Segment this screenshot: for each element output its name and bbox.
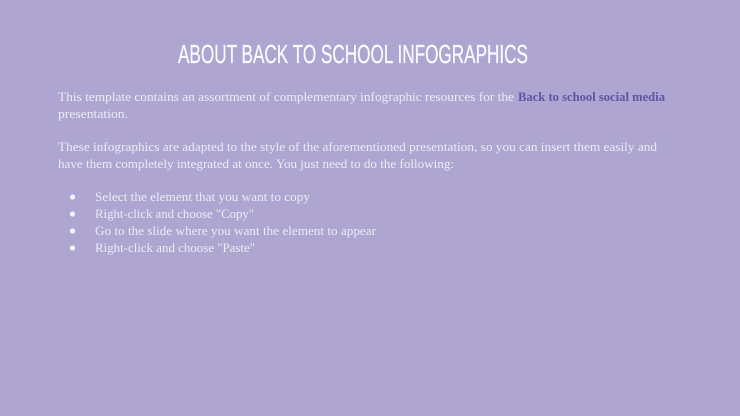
intro paragraph <box>58 89 665 121</box>
bullet list: Select the element that you want to copy <box>95 189 311 204</box>
bullet list <box>70 189 377 255</box>
second paragraph: have them completely integrated at once. You just need to do the following: <box>58 156 454 171</box>
bullet list: Right-click and choose "Copy" <box>95 206 254 221</box>
title: ABOUT BACK TO SCHOOL INFOGRAPHICS <box>178 41 528 69</box>
intro paragraph: This template contains an assortment of complementary infographic resources for the <box>58 89 514 104</box>
second paragraph: These infographics are adapted to the style of the aforementioned presentation, so you can insert them easily and <box>58 139 658 154</box>
bullet list: Go to the slide where you want the element to appear <box>95 223 377 238</box>
intro paragraph: presentation. <box>58 106 128 121</box>
bullet list: Right-click and choose "Paste" <box>95 240 255 255</box>
intro paragraph: Back to school social media <box>518 89 665 104</box>
second paragraph <box>58 139 658 171</box>
